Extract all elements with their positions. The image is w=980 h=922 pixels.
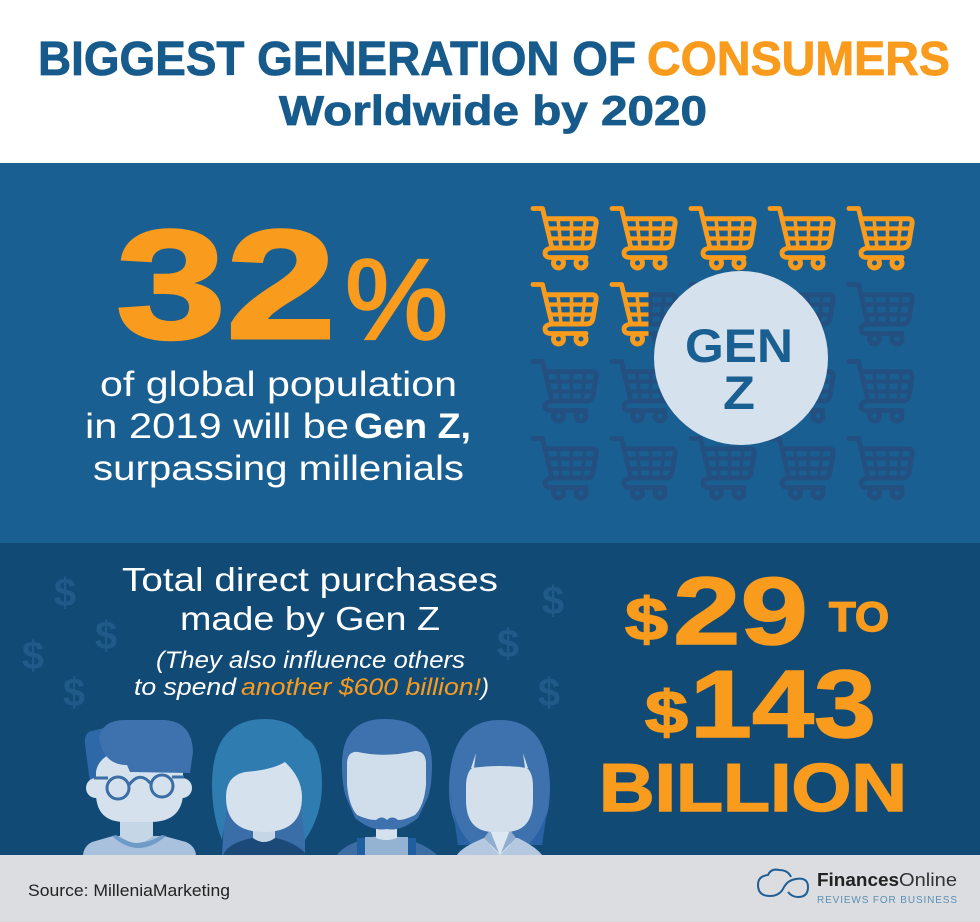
purchases heading: Total direct purchases	[122, 561, 498, 598]
decorative dollar signs: $	[54, 571, 76, 615]
decorative dollar signs: $	[538, 671, 560, 715]
person: bearded man	[337, 719, 437, 855]
icon: cloud	[758, 870, 808, 897]
population description text: of global population	[100, 365, 457, 404]
illustration: four young people	[83, 719, 550, 855]
population description text: Gen Z,	[354, 407, 471, 446]
influence note: another $600 billion!	[241, 674, 481, 701]
decorative dollar signs: $	[542, 579, 564, 623]
decorative dollar signs: $	[95, 614, 117, 658]
big number 32%: 32	[116, 198, 336, 371]
purchases heading: made by Gen Z	[180, 600, 440, 637]
background: title band	[0, 0, 980, 163]
Gen Z circle badge: GEN	[685, 319, 793, 372]
person: boy with glasses	[83, 720, 196, 855]
decorative dollar signs: $	[497, 622, 519, 666]
title	[38, 33, 950, 134]
amount: $29 to $143 billion	[599, 558, 907, 826]
source text: Source: MilleniaMarketing	[28, 881, 230, 900]
amount: $29 to $143 billion: 143	[690, 651, 876, 758]
title: CONSUMERS	[647, 33, 950, 86]
decorative dollar signs: $	[22, 634, 44, 678]
big number 32%: %	[345, 237, 448, 364]
amount: $29 to $143 billion: $	[645, 679, 688, 746]
amount: $29 to $143 billion: TO	[829, 593, 889, 640]
influence note	[134, 647, 489, 701]
Gen Z circle badge	[654, 271, 828, 445]
influence note: )	[478, 674, 489, 701]
person: woman with bangs	[449, 720, 550, 855]
FinancesOnline logo: Finances	[817, 870, 899, 890]
Gen Z circle badge: Z	[723, 366, 755, 419]
person: woman with side-swept hair	[212, 719, 322, 855]
footer bar	[0, 855, 980, 922]
panel: direct purchases	[0, 543, 980, 855]
amount: $29 to $143 billion: 29	[673, 558, 808, 665]
influence note: (They also influence others	[156, 647, 465, 674]
title: BIGGEST GENERATION OF	[38, 33, 636, 86]
population description text: surpassing millenials	[93, 449, 464, 488]
FinancesOnline logo: Online	[899, 870, 957, 890]
population description text: in 2019 will be	[85, 407, 349, 446]
big number 32%	[116, 198, 448, 371]
panel: Gen Z population share	[0, 163, 980, 543]
influence note: to spend	[134, 674, 237, 701]
FinancesOnline logo: REVIEWS FOR BUSINESS	[817, 895, 957, 906]
amount: $29 to $143 billion: BILLION	[599, 750, 907, 826]
title: Worldwide by 2020	[279, 87, 707, 134]
decorative dollar signs: $	[63, 671, 85, 715]
amount: $29 to $143 billion: $	[625, 586, 668, 653]
FinancesOnline logo	[758, 870, 957, 906]
population description text	[85, 365, 471, 488]
cart grid: 32 percent pictogram	[533, 208, 912, 498]
decorative dollar signs	[22, 571, 564, 715]
purchases heading	[122, 561, 498, 637]
